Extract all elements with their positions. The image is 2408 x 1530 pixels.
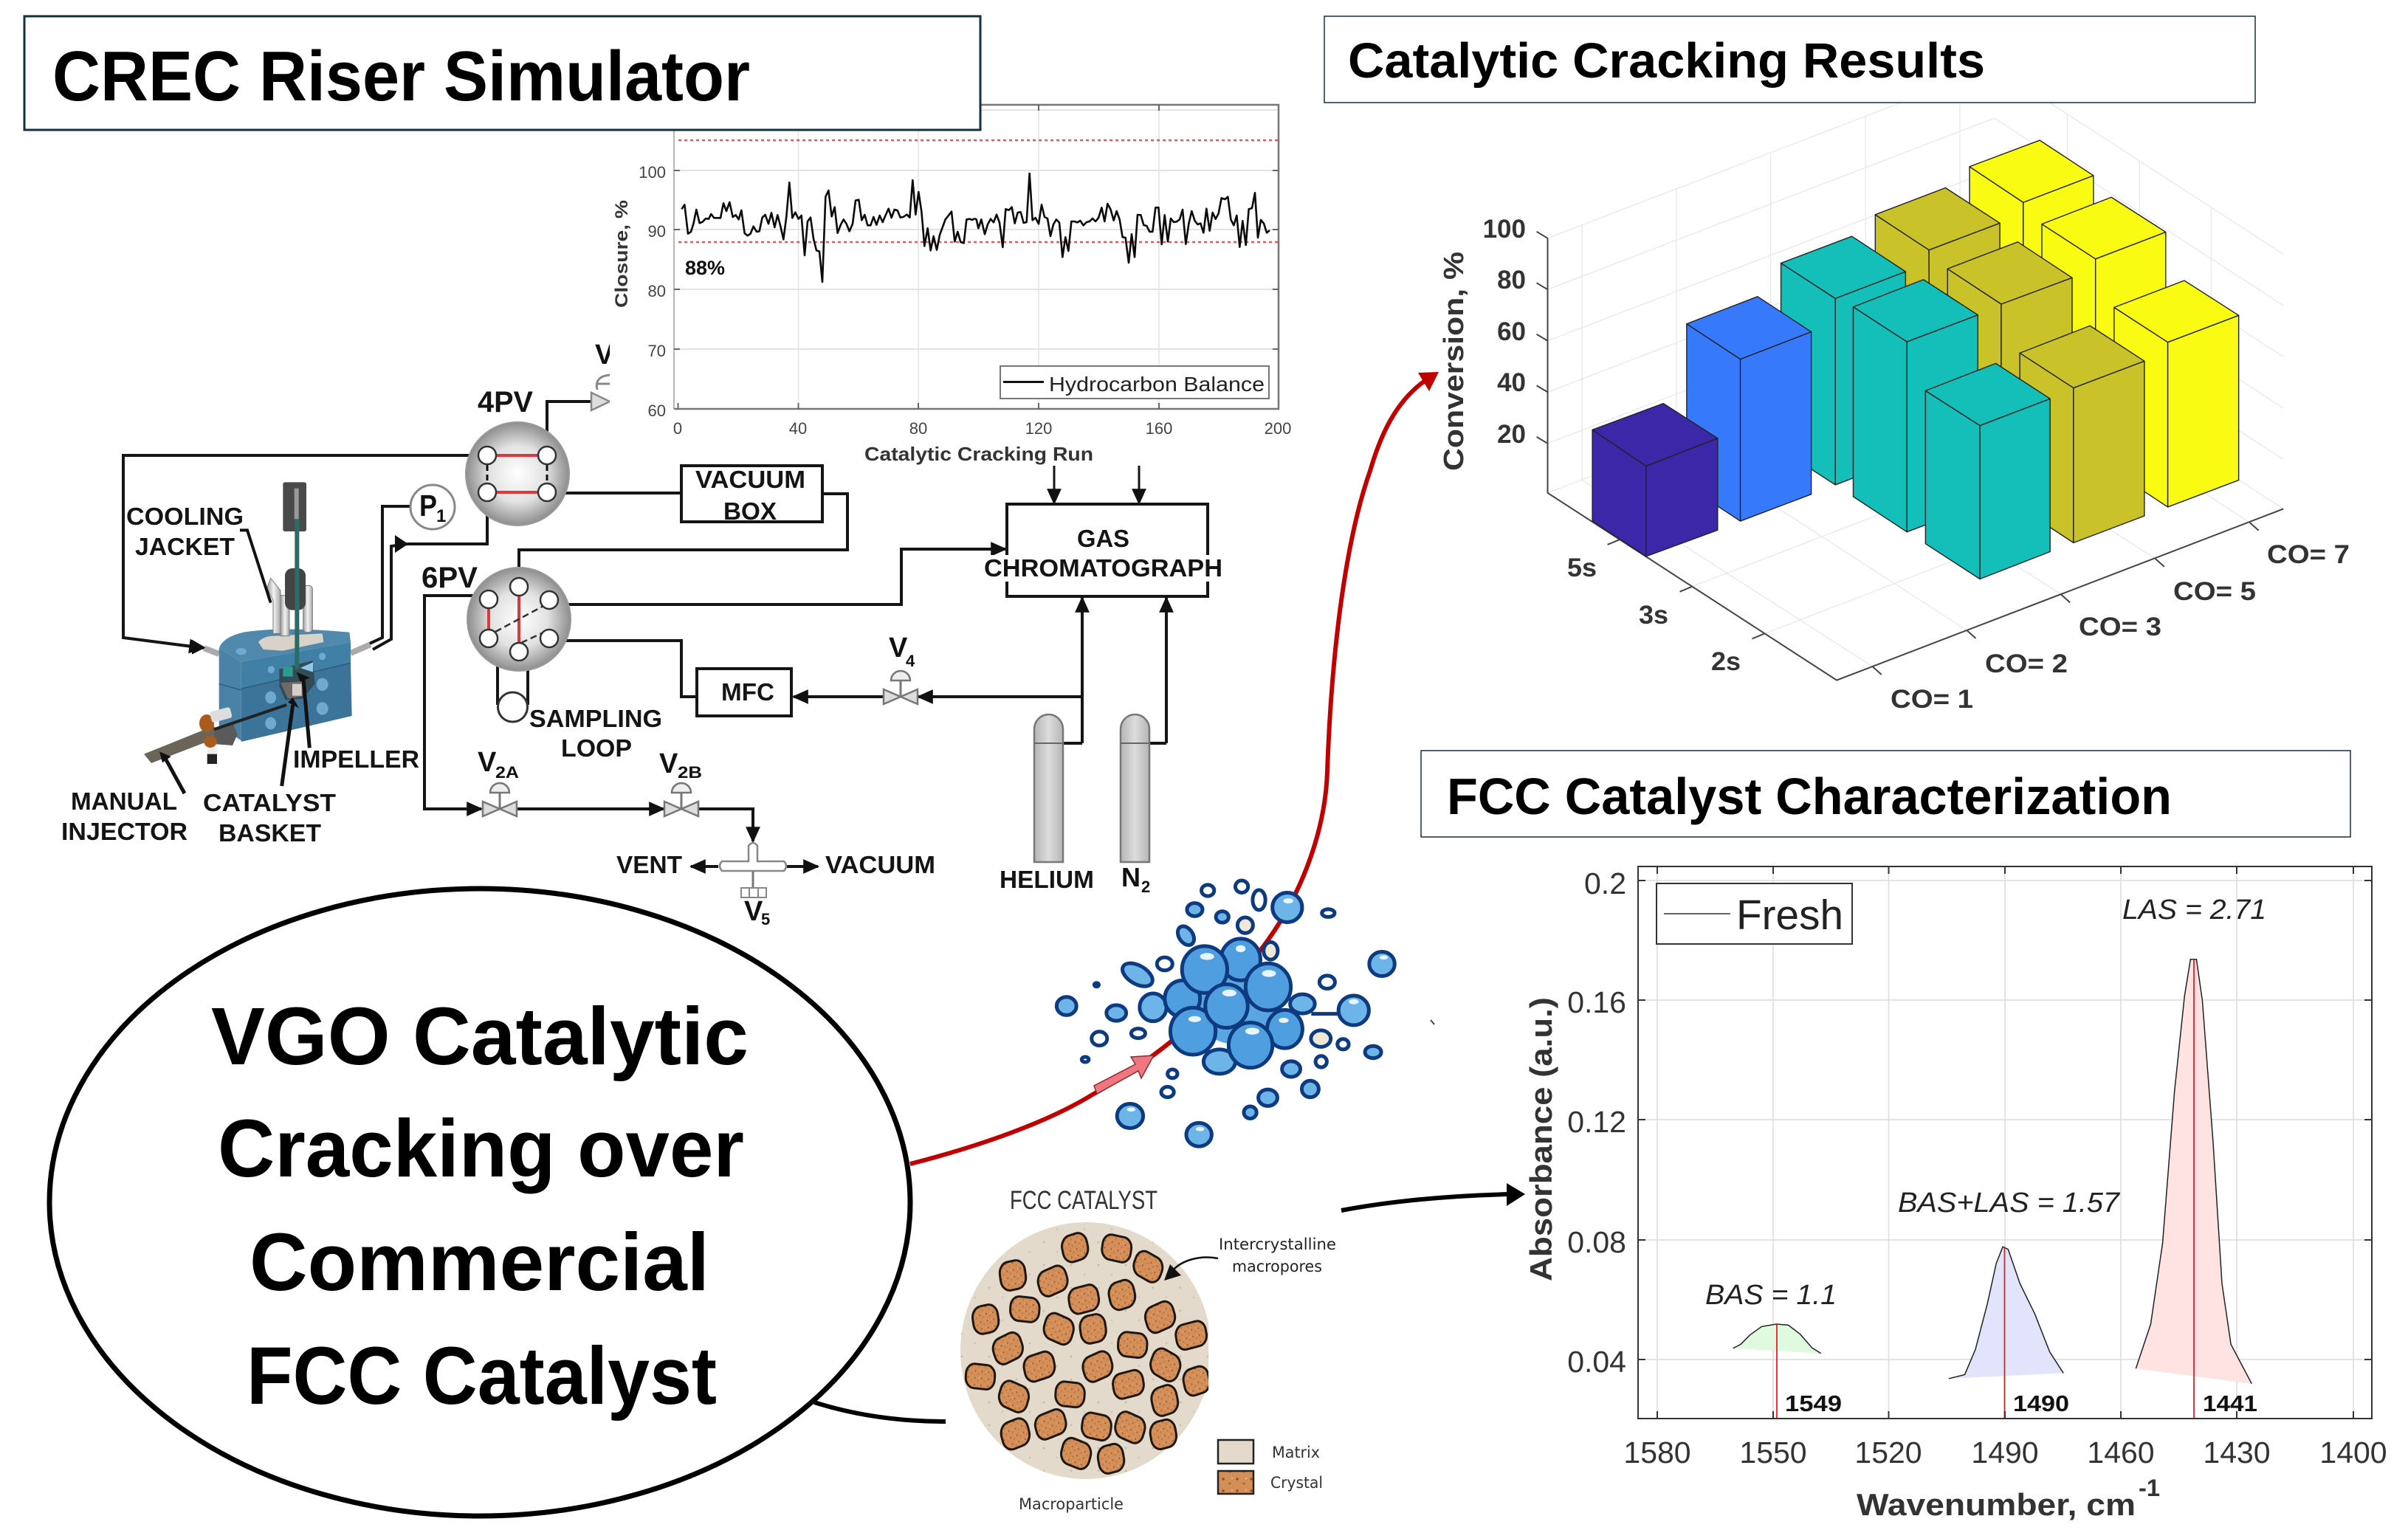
line chart: hydrocarbon balance closure (610, 96, 1300, 465)
box: vacuum box: VACUUM (695, 466, 805, 493)
bar: CO=3 3s (1853, 280, 1978, 532)
residence time labels: 5s (1567, 554, 1597, 582)
bar: CO=1 5s (1592, 404, 1718, 556)
labels: reactor parts: MANUAL (71, 788, 177, 815)
x axis tick labels: 1460 (2087, 1436, 2155, 1469)
box: gas chromatograph: CHROMATOGRAPH (984, 554, 1222, 582)
x axis tick labels: 1400 (2319, 1436, 2387, 1469)
icon: valve V4: V (889, 633, 908, 664)
y axis tick labels: 0.08 (1567, 1225, 1626, 1259)
x axis title: -1 (2139, 1475, 2160, 1501)
y axis title: Closure, % (612, 200, 632, 308)
icon: vent valve V1, partly hidden by the chart: V (595, 340, 614, 371)
z axis tick labels (1483, 215, 1526, 449)
x axis title (1857, 1475, 2160, 1522)
z axis tick labels: 60 (1497, 317, 1526, 346)
box: MFC: MFC (721, 678, 774, 706)
title: CREC Riser Simulator (24, 16, 980, 130)
process flow diagram: CREC Riser Simulator schematic (61, 340, 1224, 928)
label: sampling loop: LOOP (561, 734, 632, 762)
peak: BAS 1549 (1733, 1324, 1821, 1354)
x axis tick labels: 40 (789, 419, 807, 438)
icon: 6PV six-port valve (467, 568, 571, 671)
y axis tick labels: 100 (639, 163, 666, 182)
x axis tick labels: 160 (1146, 419, 1172, 438)
bar: CO=3 2s (1925, 363, 2050, 579)
legend: matrix and crystal: Matrix (1272, 1444, 1320, 1461)
icon: valve V2B (659, 748, 702, 816)
catalyst-to-oil labels: CO= 3 (2079, 613, 2161, 641)
icon: valve V2B: 2B (678, 763, 702, 782)
z axis tick labels: 40 (1497, 368, 1526, 397)
annotations: acid site ratios: BAS = 1.1 (1705, 1280, 1837, 1311)
peak: BAS+LAS 1490 (1949, 1247, 2063, 1379)
y axis tick labels: 60 (648, 402, 666, 420)
callout: central oval topic: VGO Catalytic (211, 991, 749, 1082)
heading: FCC Catalyst Characterization: FCC Catalyst Characterization (1447, 768, 2172, 825)
bar: CO=7 5s (1970, 140, 2094, 413)
residence time labels (1567, 554, 1741, 676)
diagram: FCC catalyst macroparticle (960, 1186, 1336, 1513)
arrow: red link from oval to cracking results (910, 372, 1439, 1164)
x axis tick labels: 0 (673, 419, 682, 438)
labels: reactor parts: COOLING (126, 503, 244, 530)
icon: 4PV four-port valve (466, 422, 569, 525)
x axis tick labels: 200 (1265, 419, 1291, 438)
icon: riser simulator reactor (144, 482, 371, 793)
speck mark (1431, 1020, 1434, 1024)
y axis tick labels: 0.16 (1567, 985, 1626, 1019)
grid lines (1548, 67, 2283, 666)
heading: Catalytic Cracking Results: Catalytic Cracking Results (1348, 33, 1985, 89)
icon: valve V2A (478, 747, 519, 816)
icon: valve V2B: V (659, 748, 678, 779)
axes (1537, 232, 2283, 680)
box: gas chromatograph (983, 504, 1224, 596)
catalyst-to-oil labels (1891, 540, 2350, 714)
catalyst-to-oil labels: CO= 5 (2173, 577, 2256, 606)
icon: pressure gauge P1: 1 (436, 506, 446, 526)
arrow: catalyst to spectrum (1341, 1183, 1525, 1210)
x axis title: Wavenumber, cm (1857, 1487, 2136, 1522)
y axis tick labels: 80 (648, 282, 666, 300)
icon: vent valve V1, partly hidden by the chart (591, 340, 614, 410)
annotations: acid site ratios: LAS = 2.71 (2122, 895, 2266, 926)
bar: CO=3 5s (1781, 236, 1905, 485)
x axis tick labels (1623, 1436, 2387, 1469)
icon: pressure gauge P1 (410, 485, 455, 529)
legend: matrix and crystal (1218, 1440, 1323, 1494)
catalyst-to-oil labels: CO= 7 (2267, 540, 2350, 569)
labels: reactor parts: CATALYST (203, 789, 336, 816)
z axis tick labels: 20 (1497, 420, 1526, 449)
callout: intercrystalline macropores: Intercrystalline (1219, 1236, 1336, 1253)
callout: intercrystalline macropores (1164, 1236, 1336, 1281)
z axis title: Conversion, % (1439, 252, 1470, 471)
y axis tick labels: 90 (648, 222, 666, 241)
bar: CO=5 5s (1875, 187, 2000, 449)
x axis tick labels: 120 (1025, 419, 1052, 438)
heading: FCC Catalyst Characterization (1421, 751, 2350, 837)
bars (1592, 140, 2239, 579)
icon: vent/vacuum tee with valve V5: V (744, 896, 763, 927)
labels: reactor parts: INJECTOR (61, 818, 188, 845)
heading: Catalytic Cracking Results (1324, 16, 2255, 103)
label: vent: VENT (616, 851, 682, 878)
annotation: 88%: 88% (685, 257, 725, 279)
catalyst-to-oil labels: CO= 2 (1985, 649, 2068, 678)
label: sampling loop: SAMPLING (529, 705, 662, 732)
z axis tick labels: 100 (1483, 215, 1526, 244)
particle with crystals (960, 1222, 1211, 1479)
icon: pressure gauge P1: P (419, 489, 437, 523)
residence time labels: 3s (1639, 601, 1668, 630)
bar: CO=5 3s (1947, 242, 2072, 496)
x axis tick labels: 1430 (2203, 1436, 2271, 1469)
labels: reactor parts: BASKET (219, 819, 321, 847)
annotations: acid site ratios: BAS+LAS = 1.57 (1898, 1188, 2121, 1219)
icon: vent/vacuum tee with valve V5 (720, 843, 786, 928)
y axis tick labels: 0.04 (1567, 1345, 1626, 1379)
connector: oval to catalyst diagram (814, 1402, 946, 1422)
annotations: peak wavenumbers: 1490 (2013, 1391, 2069, 1416)
callout: central oval topic (49, 889, 910, 1516)
legend: matrix and crystal: Crystal (1270, 1474, 1323, 1492)
box: vacuum box (681, 466, 822, 525)
x axis tick labels: 1550 (1739, 1436, 1807, 1469)
icon: valve V2A: V (478, 747, 497, 778)
title: CREC Riser Simulator: CREC Riser Simulator (52, 37, 750, 116)
icon: nitrogen cylinder: 2 (1141, 878, 1150, 896)
labels: reactor parts: IMPELLER (293, 745, 419, 773)
callout: intercrystalline macropores: macropores (1232, 1258, 1322, 1275)
icon: valve V2A: 2A (495, 763, 519, 782)
label: macroparticle: Macroparticle (1019, 1495, 1124, 1513)
icon: sampling loop (498, 692, 527, 722)
y axis tick labels: 0.12 (1567, 1105, 1626, 1139)
z axis tick labels: 80 (1497, 266, 1526, 294)
bar: CO=7 2s (2114, 280, 2239, 507)
label: 6PV: 6PV (422, 562, 478, 594)
box: gas chromatograph: GAS (1077, 525, 1129, 552)
annotations: acid site ratios (1705, 895, 2266, 1311)
icon: helium cylinder: HELIUM (1000, 866, 1094, 893)
x axis title: Catalytic Cracking Run (864, 443, 1093, 465)
fragments (1081, 881, 1349, 1097)
bar: CO=5 2s (2020, 325, 2144, 542)
icon: vent/vacuum tee with valve V5: 5 (761, 910, 770, 928)
label: 4PV: 4PV (478, 386, 533, 418)
x axis tick labels (673, 419, 1291, 438)
label: FCC CATALYST: FCC CATALYST (1010, 1186, 1157, 1215)
chart: 3D conversion bar chart (1439, 67, 2350, 714)
legend: Fresh (1657, 883, 1852, 944)
icon: catalyst particle cluster (1056, 881, 1394, 1146)
chart: FTIR spectrum (1524, 866, 2387, 1522)
box: vacuum box: BOX (723, 497, 777, 525)
callout: central oval topic: Cracking over (218, 1103, 744, 1194)
x axis tick labels: 1580 (1623, 1436, 1691, 1469)
icon: valve V4 (884, 633, 918, 704)
box: MFC (697, 669, 791, 716)
arrow: small pink marker (1094, 1055, 1154, 1094)
large spheres (1193, 962, 1278, 1044)
labels: reactor parts: JACKET (135, 533, 235, 560)
y axis title: Absorbance (a.u.) (1524, 997, 1558, 1281)
legend (1000, 366, 1269, 399)
catalyst-to-oil labels: CO= 1 (1891, 685, 1973, 714)
icon: valve V4: 4 (906, 652, 915, 670)
annotations: peak wavenumbers: 1549 (1785, 1391, 1842, 1416)
callout: central oval topic: FCC Catalyst (247, 1331, 717, 1422)
x axis tick labels: 1490 (1971, 1436, 2039, 1469)
piping lines (123, 402, 1166, 866)
x axis tick labels: 80 (909, 419, 927, 438)
label: vacuum: VACUUM (825, 851, 935, 878)
annotations: peak wavenumbers (1785, 1391, 2257, 1416)
x axis tick labels: 1520 (1854, 1436, 1922, 1469)
bar: CO=7 3s (2042, 197, 2166, 460)
legend: Fresh: Fresh (1736, 892, 1843, 939)
y axis tick labels: 70 (648, 342, 666, 360)
legend: Hydrocarbon Balance (1049, 373, 1265, 396)
label: sampling loop (529, 705, 662, 762)
residence time labels: 2s (1711, 647, 1741, 676)
icon: helium cylinder (1000, 714, 1094, 893)
icon: nitrogen cylinder: N (1121, 862, 1141, 892)
y axis tick labels (1567, 866, 1626, 1379)
data series (681, 173, 1270, 282)
annotations: peak wavenumbers: 1441 (2203, 1391, 2257, 1416)
bar: CO=2 5s (1687, 297, 1812, 521)
y axis tick labels: 0.2 (1584, 866, 1626, 900)
labels: reactor parts (61, 503, 419, 847)
callout: central oval topic: Commercial (250, 1217, 709, 1308)
y axis tick labels (639, 163, 666, 420)
peak: LAS 1441 (2136, 959, 2252, 1384)
icon: nitrogen cylinder (1121, 714, 1150, 896)
